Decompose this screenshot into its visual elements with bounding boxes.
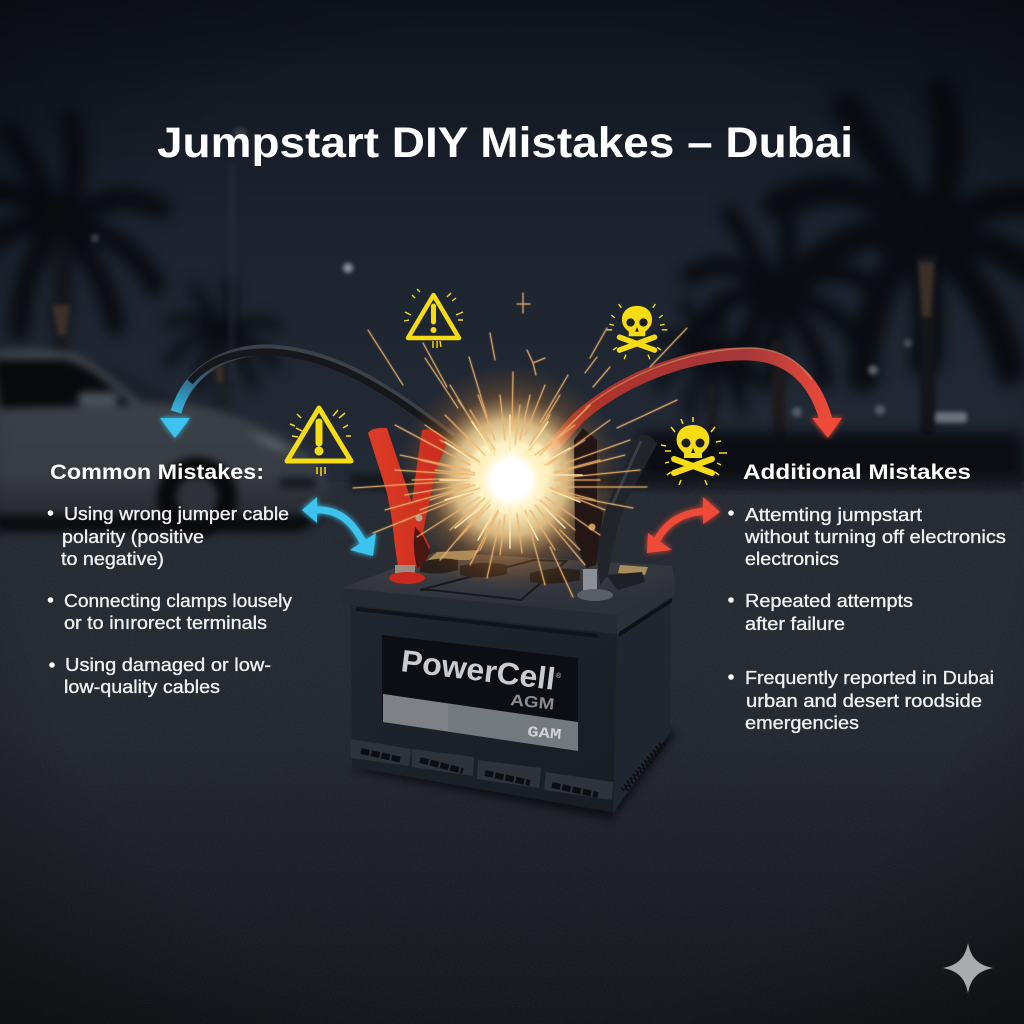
list: additional mistakes: emergencies [745, 713, 859, 733]
AGM text: AGM [510, 692, 555, 714]
blue double arrow [302, 497, 376, 556]
red top arrowhead [812, 418, 842, 438]
panel: additional mistakes [728, 461, 1006, 733]
palm trees [0, 92, 1024, 412]
battery lid [342, 588, 617, 634]
battery body [350, 603, 617, 813]
skull icon top [607, 304, 667, 359]
spark glow [395, 363, 625, 593]
black clamp [574, 428, 657, 601]
battery shadow [350, 720, 675, 820]
spark core [471, 444, 552, 510]
panel: common mistakes [48, 461, 292, 697]
list: common mistakes: polarity (positive [62, 527, 204, 547]
blue top arrowhead [160, 418, 190, 438]
warning icon top [404, 289, 463, 348]
red clamp base [395, 565, 415, 577]
icon: sparkle watermark [943, 943, 993, 993]
palm trunks [52, 255, 937, 445]
black clamp terminal [583, 569, 597, 592]
list: common mistakes: or to inırorect terminals [64, 613, 267, 633]
red double arrow [647, 497, 720, 553]
GAM text: GAM [527, 724, 562, 744]
list: additional mistakes: Frequently reported in Dubai [745, 668, 994, 688]
skyline dark band [640, 432, 1024, 490]
warning icon left [287, 408, 351, 476]
background night sky [0, 0, 1024, 520]
heading: common mistakes: Common Mistakes: [50, 461, 264, 484]
PowerCell brand: PowerCell [399, 643, 557, 697]
list: additional mistakes: after failure [745, 614, 845, 634]
cable black [176, 350, 452, 440]
list: common mistakes [48, 504, 292, 697]
spark rays bright [440, 415, 582, 548]
battery top details [420, 560, 566, 600]
list: common mistakes: Connecting clamps lousely [64, 591, 292, 611]
cable red [548, 348, 826, 452]
registered mark: ® [556, 672, 562, 680]
ground [0, 482, 1024, 1024]
list: additional mistakes: without turning off electronics [744, 527, 1006, 547]
blurred car [0, 349, 330, 537]
list: additional mistakes: Repeated attempts [745, 591, 913, 611]
heading: additional mistakes: Additional Mistakes [743, 461, 971, 484]
skull icon bottom [661, 417, 727, 485]
street lights [91, 127, 967, 423]
battery vents [361, 742, 666, 795]
list: additional mistakes: electronics [745, 549, 839, 569]
title: Jumpstart DIY Mistakes – Dubai [157, 119, 853, 167]
spark burst [353, 293, 687, 597]
list: common mistakes: to negative) [61, 549, 164, 569]
red clamp [368, 428, 447, 584]
spark rays [353, 293, 687, 597]
battery label [382, 635, 578, 751]
battery [342, 550, 675, 820]
list: additional mistakes: Attemting jumpstart [745, 505, 922, 525]
list: common mistakes: low-quality cables [64, 677, 220, 697]
list: common mistakes: Using wrong jumper cable [64, 504, 289, 524]
list: additional mistakes [728, 505, 1006, 733]
list: common mistakes: Using damaged or low- [65, 655, 271, 675]
battery feet [351, 739, 613, 800]
list: additional mistakes: urban and desert roodside [746, 691, 982, 711]
